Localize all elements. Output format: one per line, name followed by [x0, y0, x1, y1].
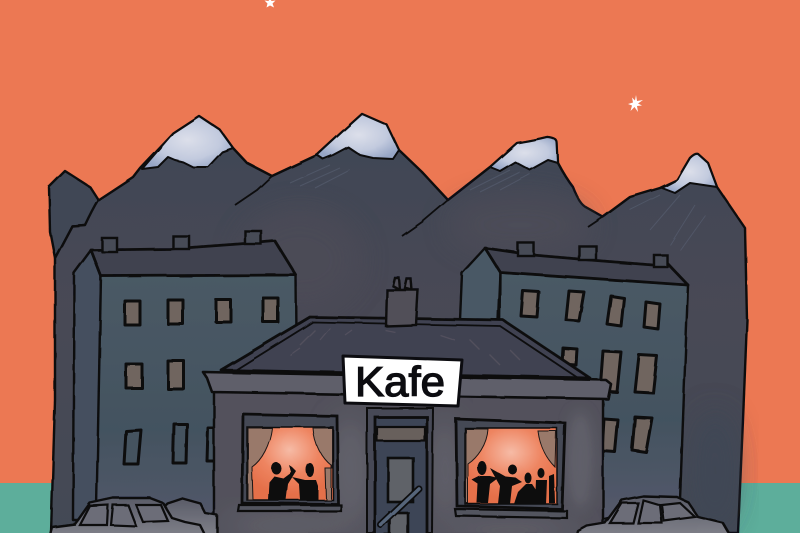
rear car	[160, 498, 217, 533]
right window: glowing pane	[465, 428, 557, 504]
left block: chimneys	[102, 231, 261, 252]
cafe: wall glow	[220, 410, 594, 533]
snow cap: fourth peak	[662, 154, 717, 193]
snow cap: first peak	[142, 116, 233, 169]
left block: windows	[124, 298, 278, 464]
right window: silhouettes	[472, 461, 555, 504]
front car windows	[80, 505, 168, 526]
right block: windows	[521, 291, 660, 452]
car: left foreground	[50, 498, 217, 533]
left window: glowing pane	[247, 427, 333, 500]
building: cafe	[203, 278, 611, 533]
right block: front wall	[498, 272, 688, 520]
right window: frame	[456, 419, 565, 509]
door: transom	[377, 427, 425, 441]
cafe sign	[343, 356, 462, 406]
building: left apartment block	[73, 231, 298, 533]
cafe: chimney	[386, 278, 418, 326]
left block: gable wall	[73, 250, 101, 520]
car: right foreground	[577, 496, 730, 533]
star: right	[628, 95, 643, 112]
door: frame	[375, 417, 427, 533]
left window: frame	[242, 414, 338, 504]
cafe: cornice	[203, 372, 611, 399]
door: upper panel	[388, 458, 413, 502]
right cafe window	[455, 419, 567, 518]
door: lower panel	[390, 513, 408, 533]
mountain ridge lines	[235, 176, 603, 236]
sign text: Kafe	[355, 358, 445, 405]
snow cap: second peak	[317, 114, 399, 159]
left cafe window	[238, 414, 341, 511]
mountain: main mass	[51, 114, 747, 533]
star: top	[264, 0, 276, 8]
right car body	[577, 496, 730, 533]
left window: sill	[238, 505, 341, 511]
front car body	[50, 498, 205, 533]
sign board	[343, 356, 462, 406]
mountain shading	[240, 195, 737, 530]
left block: front wall	[96, 275, 298, 533]
door: handle	[381, 489, 419, 525]
left block: roof	[91, 241, 296, 276]
right block: chimneys	[518, 243, 667, 267]
building: right apartment block	[460, 243, 688, 520]
right car windows	[610, 500, 695, 523]
right block: gable wall	[460, 248, 500, 320]
left window: curtains	[248, 428, 272, 500]
right window: sill	[455, 509, 567, 518]
cafe: door surround	[367, 408, 433, 533]
cafe: roof eave line	[236, 322, 578, 378]
cafe: roof slate marks	[290, 328, 520, 365]
right block: roof	[485, 248, 688, 285]
right window: curtains	[466, 429, 488, 503]
cafe: roof	[221, 317, 590, 378]
mountain: far left peak	[49, 171, 99, 258]
cafe: wall	[214, 392, 603, 533]
mountain range	[49, 114, 747, 533]
left window: silhouettes	[268, 462, 318, 500]
ground band	[0, 483, 800, 533]
mountain hatching	[290, 165, 705, 250]
snow cap: third peak	[490, 137, 558, 171]
